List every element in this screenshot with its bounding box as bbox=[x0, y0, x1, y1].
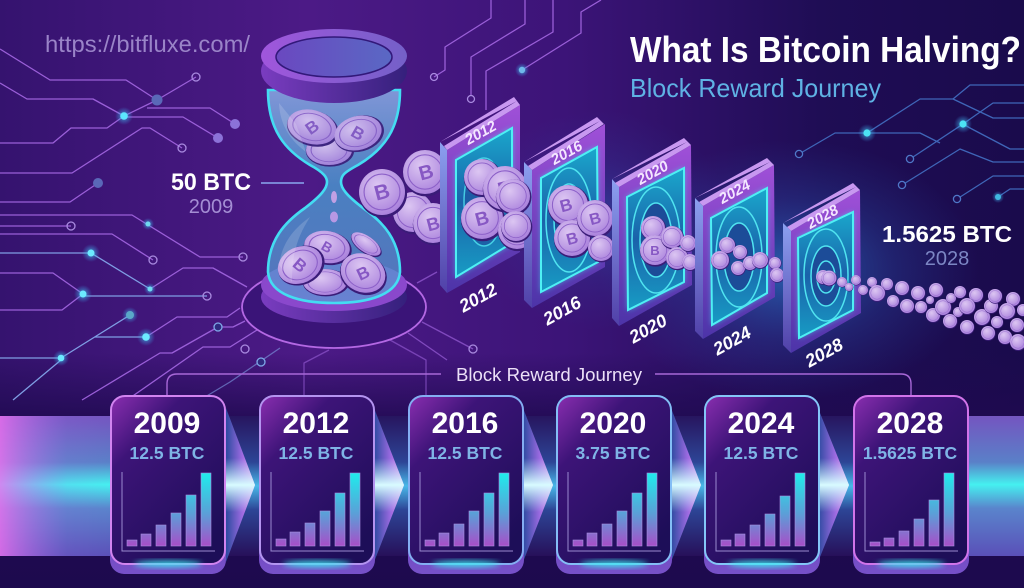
falling coins in neck bbox=[330, 191, 338, 222]
frame 2016: 2016 bbox=[539, 292, 585, 330]
hourglass base bbox=[261, 259, 407, 323]
coins in 2012 frame: B bbox=[473, 208, 492, 231]
card: 2028: 2028 bbox=[877, 407, 943, 440]
card: 2012 bbox=[259, 396, 375, 574]
coins in lower bulb: B bbox=[319, 238, 335, 256]
frame 2020 bbox=[612, 138, 692, 348]
coins in lower bulb: B bbox=[354, 262, 373, 285]
coins in upper bulb: B bbox=[302, 116, 323, 139]
card: 2024 bbox=[704, 396, 820, 574]
frame 2016 bbox=[524, 117, 605, 330]
callout: 1.5625 BTC 2028: 2028 bbox=[925, 248, 969, 270]
callout: 50 BTC 2009 bbox=[171, 169, 304, 218]
timeline band bbox=[0, 416, 1024, 556]
card: 2012: 12.5 BTC bbox=[279, 443, 354, 463]
card: 2024: 2024 bbox=[728, 407, 795, 440]
coins in lower bulb bbox=[271, 227, 394, 303]
callout: 50 BTC 2009: 50 BTC bbox=[171, 169, 251, 196]
circuit lines: right bbox=[795, 85, 1024, 203]
coins in 2020 frame: B bbox=[650, 243, 660, 258]
frame 2020: 2020 bbox=[625, 310, 670, 348]
frame 2028: 2028 bbox=[803, 201, 842, 233]
frame 2024: 2024 bbox=[709, 322, 754, 360]
hourglass glass bbox=[268, 90, 400, 303]
card: 2028: 1.5625 BTC bbox=[863, 443, 958, 463]
frame 2028 bbox=[783, 183, 861, 372]
circuit lines: top centre bbox=[430, 0, 601, 110]
circuit lines: bottom left bbox=[0, 215, 477, 400]
circuit lines: top left bbox=[0, 49, 240, 202]
frame 2028: 2028 bbox=[801, 334, 846, 372]
card: 2020 bbox=[556, 396, 672, 574]
card: 2020: 2020 bbox=[580, 407, 646, 440]
coins in lower bulb: B bbox=[289, 254, 310, 277]
callout: 50 BTC 2009: 2009 bbox=[189, 196, 233, 218]
callout: 1.5625 BTC 2028 bbox=[882, 221, 1012, 270]
coins in 2012 frame: B bbox=[495, 176, 515, 201]
callout: 1.5625 BTC 2028: 1.5625 BTC bbox=[882, 221, 1012, 247]
arrows between cards bbox=[226, 408, 849, 562]
coins in 2016 frame: B bbox=[588, 210, 603, 229]
frame 2012 bbox=[440, 97, 520, 317]
coins in 2024 frame bbox=[711, 237, 785, 283]
frame 2024: 2024 bbox=[715, 176, 754, 208]
card: 2009: 12.5 BTC bbox=[130, 443, 205, 463]
coins in 2016 frame: B bbox=[565, 230, 580, 249]
coins between hourglass and 2012 frame bbox=[359, 150, 455, 245]
coins in 2016 frame bbox=[496, 179, 615, 262]
coins in upper bulb: B bbox=[348, 122, 368, 145]
hourglass floor ring bbox=[242, 266, 426, 348]
coins in 2012 frame bbox=[461, 159, 538, 251]
coins in 2016 frame: B bbox=[558, 195, 575, 216]
timeline heading with bracket bbox=[167, 364, 911, 395]
coins in 2020 frame bbox=[640, 216, 699, 271]
website url: https://bitfluxe.com/ bbox=[45, 31, 251, 57]
hourglass glass highlight bbox=[279, 103, 310, 282]
card: 2012: 2012 bbox=[283, 407, 349, 440]
timeline heading with bracket: Block Reward Journey bbox=[456, 364, 643, 385]
frame 2020: 2020 bbox=[633, 157, 672, 189]
card: 2028 bbox=[853, 396, 969, 574]
frame 2012: 2012 bbox=[461, 117, 500, 149]
card: 2016 bbox=[408, 396, 524, 574]
coins in 2012 frame: B bbox=[512, 222, 527, 241]
card: 2024: 12.5 BTC bbox=[724, 443, 799, 463]
coins between hourglass and 2012 frame: B bbox=[416, 160, 436, 185]
coins in upper bulb bbox=[283, 104, 388, 167]
coin stream flowing out of 2028 frame bbox=[816, 270, 1024, 351]
frame 2024 bbox=[695, 158, 775, 360]
card: 2009: 2009 bbox=[134, 407, 200, 440]
coins between hourglass and 2012 frame: B bbox=[424, 213, 442, 235]
hourglass bbox=[242, 29, 426, 348]
hourglass top cap bbox=[261, 29, 407, 103]
card: 2016: 2016 bbox=[432, 407, 498, 440]
frame 2012: 2012 bbox=[455, 279, 500, 317]
card: 2016: 12.5 BTC bbox=[428, 443, 503, 463]
frame 2016: 2016 bbox=[547, 137, 586, 169]
card: 2009 bbox=[110, 396, 226, 574]
card: 2020: 3.75 BTC bbox=[576, 443, 651, 463]
coins between hourglass and 2012 frame: B bbox=[372, 179, 392, 206]
subtitle: Block Reward Journey bbox=[630, 73, 881, 103]
